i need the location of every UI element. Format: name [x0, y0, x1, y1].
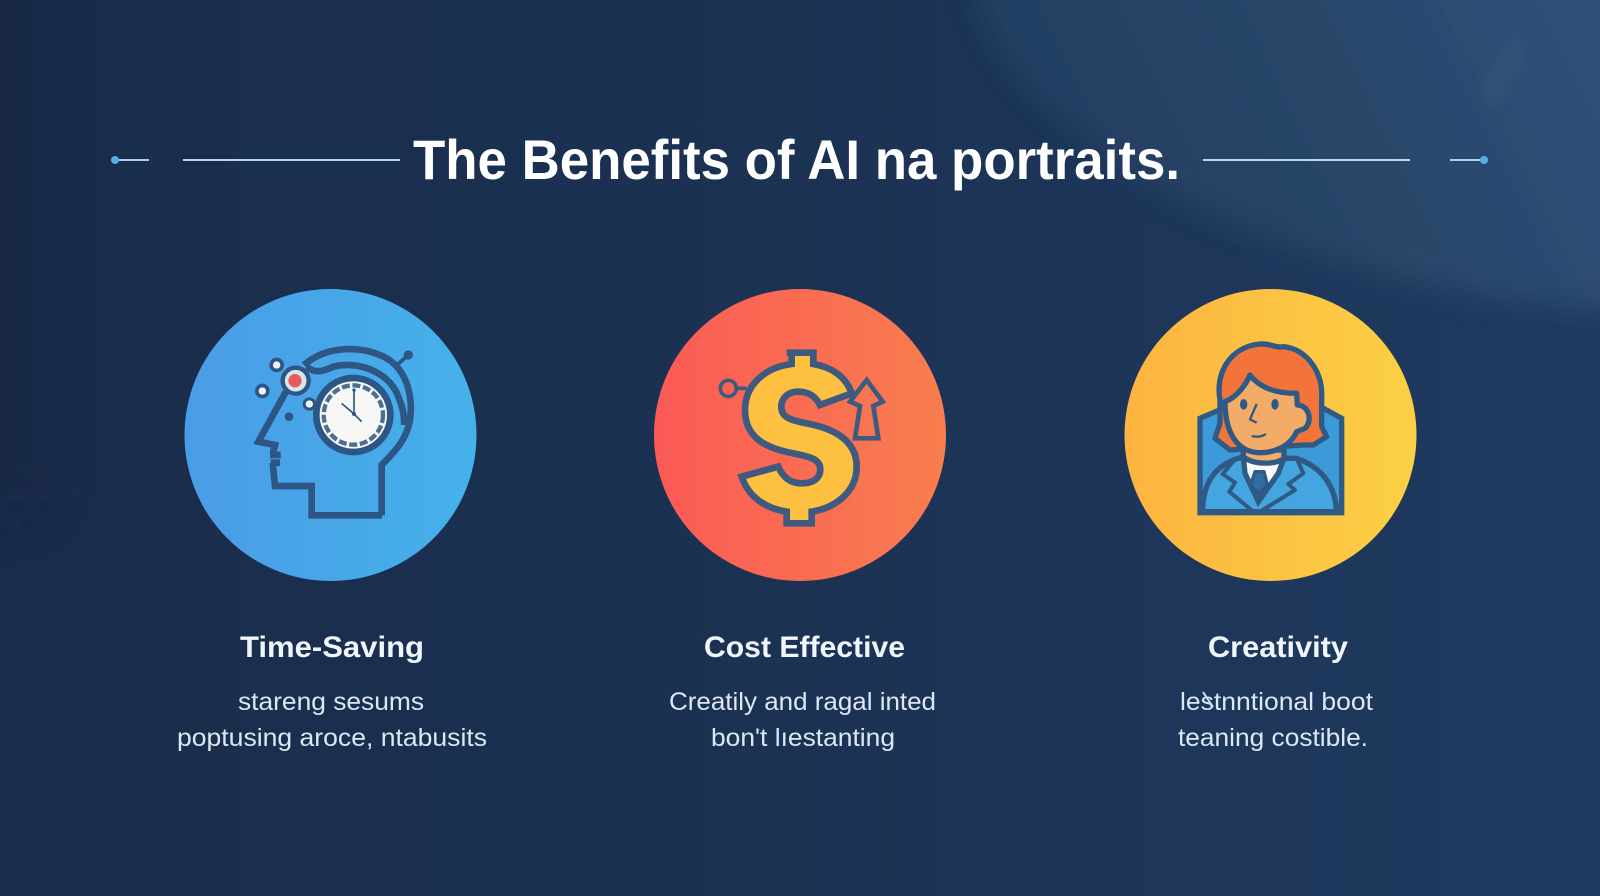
- heading: creativity: Creativity: [1208, 631, 1348, 664]
- text: cost effective description: bon't lıestanting: [711, 724, 895, 752]
- icon circle: blue: [184, 289, 476, 581]
- icon: person portrait: [1200, 344, 1342, 513]
- icon circle: yellow: [1124, 289, 1416, 581]
- title rule: right: [1203, 156, 1488, 164]
- icon: up arrow: [850, 380, 883, 438]
- panel: cost effective: [654, 289, 946, 752]
- title rule: left: [111, 156, 400, 164]
- text: time-saving description: [177, 688, 487, 752]
- text: time-saving description: poptusing aroce, ntabusits: [177, 724, 487, 752]
- icon: head with clock: [255, 349, 413, 515]
- text: creativity description: lestnntional boot: [1180, 688, 1373, 716]
- text: creativity description: teaning costible.: [1178, 724, 1368, 752]
- icon: dollar sign with arrow: [720, 353, 883, 523]
- heading: time-saving: Time-Saving: [240, 631, 424, 664]
- heading: cost effective: Cost Effective: [704, 631, 905, 664]
- icon: clock face: [316, 378, 390, 452]
- icon: gears and sensor: [255, 358, 316, 421]
- panel: time-saving: [177, 289, 487, 752]
- text: creativity description: [1178, 688, 1373, 752]
- text: cost effective description: [669, 688, 936, 752]
- panel: creativity: [1124, 289, 1416, 752]
- text: cost effective description: Creatily and ragal inted: [669, 688, 936, 716]
- text: time-saving description: stareng sesums: [238, 688, 424, 716]
- title: The Benefits of AI na portraits.: [413, 128, 1180, 191]
- icon circle: red: [654, 289, 946, 581]
